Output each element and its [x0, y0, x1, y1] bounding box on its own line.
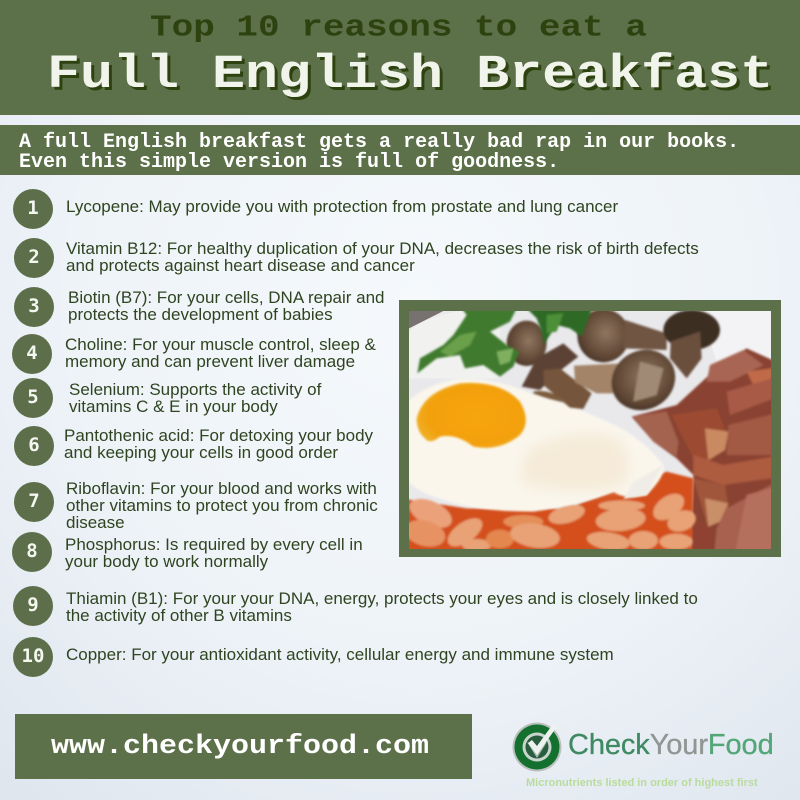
reason 10: [13, 637, 614, 677]
breakfast photo illustration: [399, 300, 781, 557]
photo frame: [399, 300, 781, 557]
intro text: A full English breakfast gets a really bad rap in our books. Even this simple version is full of goodness.: [19, 131, 739, 174]
reason 3: 3: [28, 295, 40, 317]
parsley: [416, 311, 593, 378]
reason 8: 8: [26, 540, 38, 562]
beans and sauce: [409, 470, 697, 549]
bacon: [630, 347, 771, 549]
title line 1: Top 10 reasons to eat a: [150, 10, 647, 45]
reason 5: Selenium: Supports the activity of vitamins C & E in your body: [69, 380, 321, 416]
intro band: [0, 125, 800, 175]
reason 2: Vitamin B12: For healthy duplication of your DNA, decreases the risk of birth defects and protects against heart disease and cancer: [66, 239, 699, 275]
wordmark: CheckYourFood: [568, 729, 774, 761]
reason 8: Phosphorus: Is required by every cell in your body to work normally: [65, 535, 363, 571]
reason 7: Riboflavin: For your blood and works with other vitamins to protect you from chronic disease: [66, 479, 378, 532]
reason 10: 10: [22, 645, 44, 667]
reason 1: [13, 189, 618, 229]
reason 1: Lycopene: May provide you with protection from prostate and lung cancer: [66, 197, 618, 216]
reason 3: Biotin (B7): For your cells, DNA repair and protects the development of babies: [68, 288, 385, 324]
egg white: [400, 379, 664, 512]
header band: [0, 0, 800, 115]
reasons list: [12, 189, 699, 677]
plate: [409, 311, 771, 549]
reason 5: 5: [27, 386, 39, 408]
reason 1: 1: [27, 197, 39, 219]
reason 4: Choline: For your muscle control, sleep & memory and can prevent liver damage: [65, 335, 376, 371]
title line 2: Full English Breakfast: [47, 48, 773, 102]
egg yolk: [417, 383, 526, 448]
website banner: [15, 714, 472, 779]
footnote: Micronutrients listed in order of highest first: [526, 777, 758, 789]
reason 6: Pantothenic acid: For detoxing your body and keeping your cells in good order: [64, 426, 373, 462]
photo contents: [409, 311, 771, 549]
reason 6: 6: [28, 434, 40, 456]
reason 7: 7: [28, 490, 40, 512]
logo: CheckYourFood: [512, 722, 774, 772]
website url: www.checkyourfood.com: [51, 732, 429, 762]
reason 10: Copper: For your antioxidant activity, cellular energy and immune system: [66, 645, 614, 664]
mushrooms: [507, 309, 720, 422]
reason 9: Thiamin (B1): For your your DNA, energy, protects your eyes and is closely linked to the activity of other B vitamins: [66, 589, 698, 625]
icon: check badge: [512, 722, 562, 772]
reason 4: 4: [26, 342, 38, 364]
reason 9: 9: [27, 594, 39, 616]
reason 2: 2: [28, 246, 40, 268]
